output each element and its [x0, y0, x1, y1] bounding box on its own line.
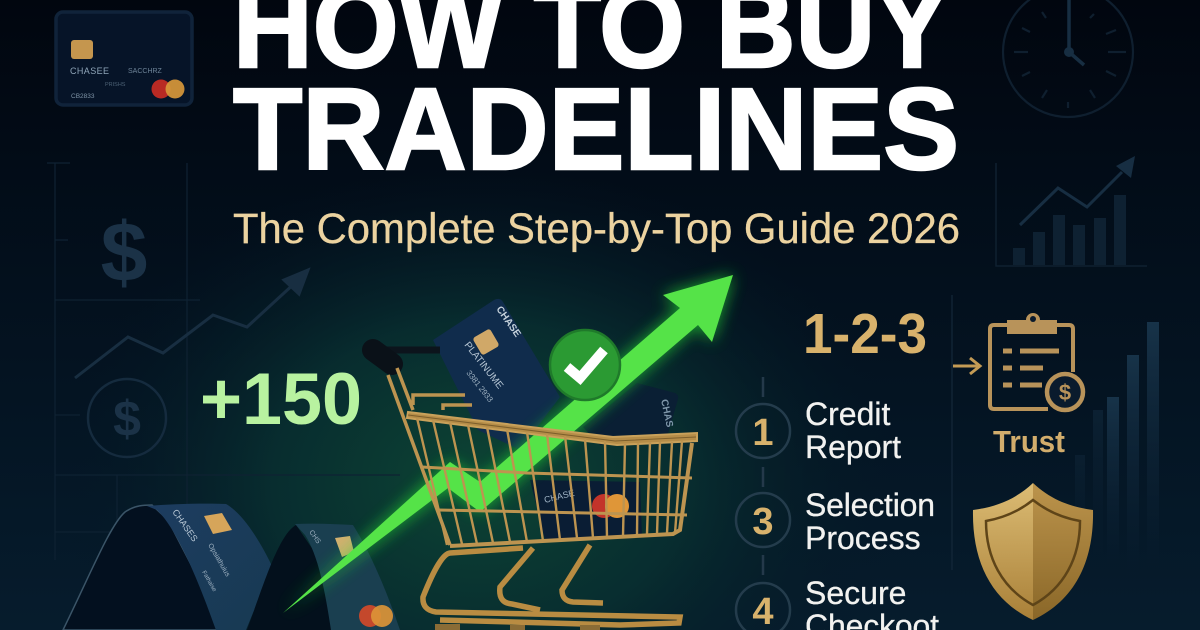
credit card in cart: lower: CHASE: [543, 488, 576, 505]
bar chart: faint lower right: [1075, 322, 1159, 575]
icon: faint dollar sign: $: [101, 205, 147, 299]
step 1: 1: [752, 412, 774, 454]
cart wire grid: [417, 418, 682, 545]
credit card in cart: platinum: [433, 299, 560, 450]
wavy credit card: right: CHS: [307, 529, 322, 546]
wavy credit card: left: Opsiathuius: [206, 542, 231, 578]
subtitle: The Complete Step-by-Top Guide 2026: [233, 205, 960, 253]
step 1: Credit: [805, 396, 890, 432]
cart legs: [423, 545, 680, 625]
label: trust: Trust: [993, 424, 1065, 459]
credit card in cart: lower: [530, 480, 642, 540]
cart wheels: [435, 627, 600, 628]
heading: 1-2-3: 1-2-3: [803, 302, 927, 366]
vertical divider: [951, 295, 953, 570]
wavy credit card: left: [63, 504, 272, 630]
credit card in cart: back: [583, 383, 678, 445]
credit card in cart: platinum: CHASE: [494, 304, 523, 340]
shopping cart: [373, 350, 697, 628]
main title: [233, 0, 959, 194]
credit card in cart: platinum: 3381 2933: [464, 369, 495, 404]
cart frame: [388, 368, 697, 546]
icon: faint dollar coin: $: [113, 391, 141, 447]
icon: green check badge: [550, 330, 620, 400]
credit card in cart: back: CHAS: [658, 398, 675, 429]
score gain label: +150: [200, 359, 362, 440]
credit card: top left: PRISHS: [105, 82, 126, 88]
icon: clipboard with dollar: [990, 313, 1083, 410]
wavy credit card: left: CHASES: [170, 507, 200, 543]
step 3: 3: [752, 501, 774, 543]
step connectors: [762, 377, 764, 575]
credit card in cart: platinum: PLATINUME: [462, 340, 505, 392]
wavy credit card: right: [247, 524, 400, 630]
step 4: [736, 575, 939, 630]
arrow: to clipboard: [953, 358, 980, 374]
icon: faint rising line arrow: [75, 270, 308, 378]
step 3: Selection: [805, 487, 935, 523]
step 1: [736, 396, 901, 465]
credit card: top left: SACCHRZ: [128, 68, 163, 75]
bar chart: faint top right: [996, 156, 1147, 266]
icon: faint dollar coin: [88, 379, 166, 457]
icon: faint clock: [1003, 0, 1133, 117]
credit card: top left: CHASEE: [70, 66, 109, 76]
step 3: [736, 487, 935, 556]
arrow: green growth: [283, 275, 733, 613]
credit card: top left: CB2833: [71, 93, 95, 100]
background chart: left grid: [47, 163, 400, 560]
step 4: Secure: [805, 575, 906, 611]
wavy credit card: left: Fathaise: [200, 570, 217, 594]
credit card: top left: [56, 12, 192, 105]
step 1: Report: [805, 429, 901, 465]
icon: gold shield: [973, 483, 1093, 620]
step 3: Process: [805, 520, 921, 556]
cart handle: [373, 350, 440, 364]
icon: clipboard with dollar: $: [1059, 380, 1071, 405]
main title: TRADELINES: [233, 64, 959, 194]
